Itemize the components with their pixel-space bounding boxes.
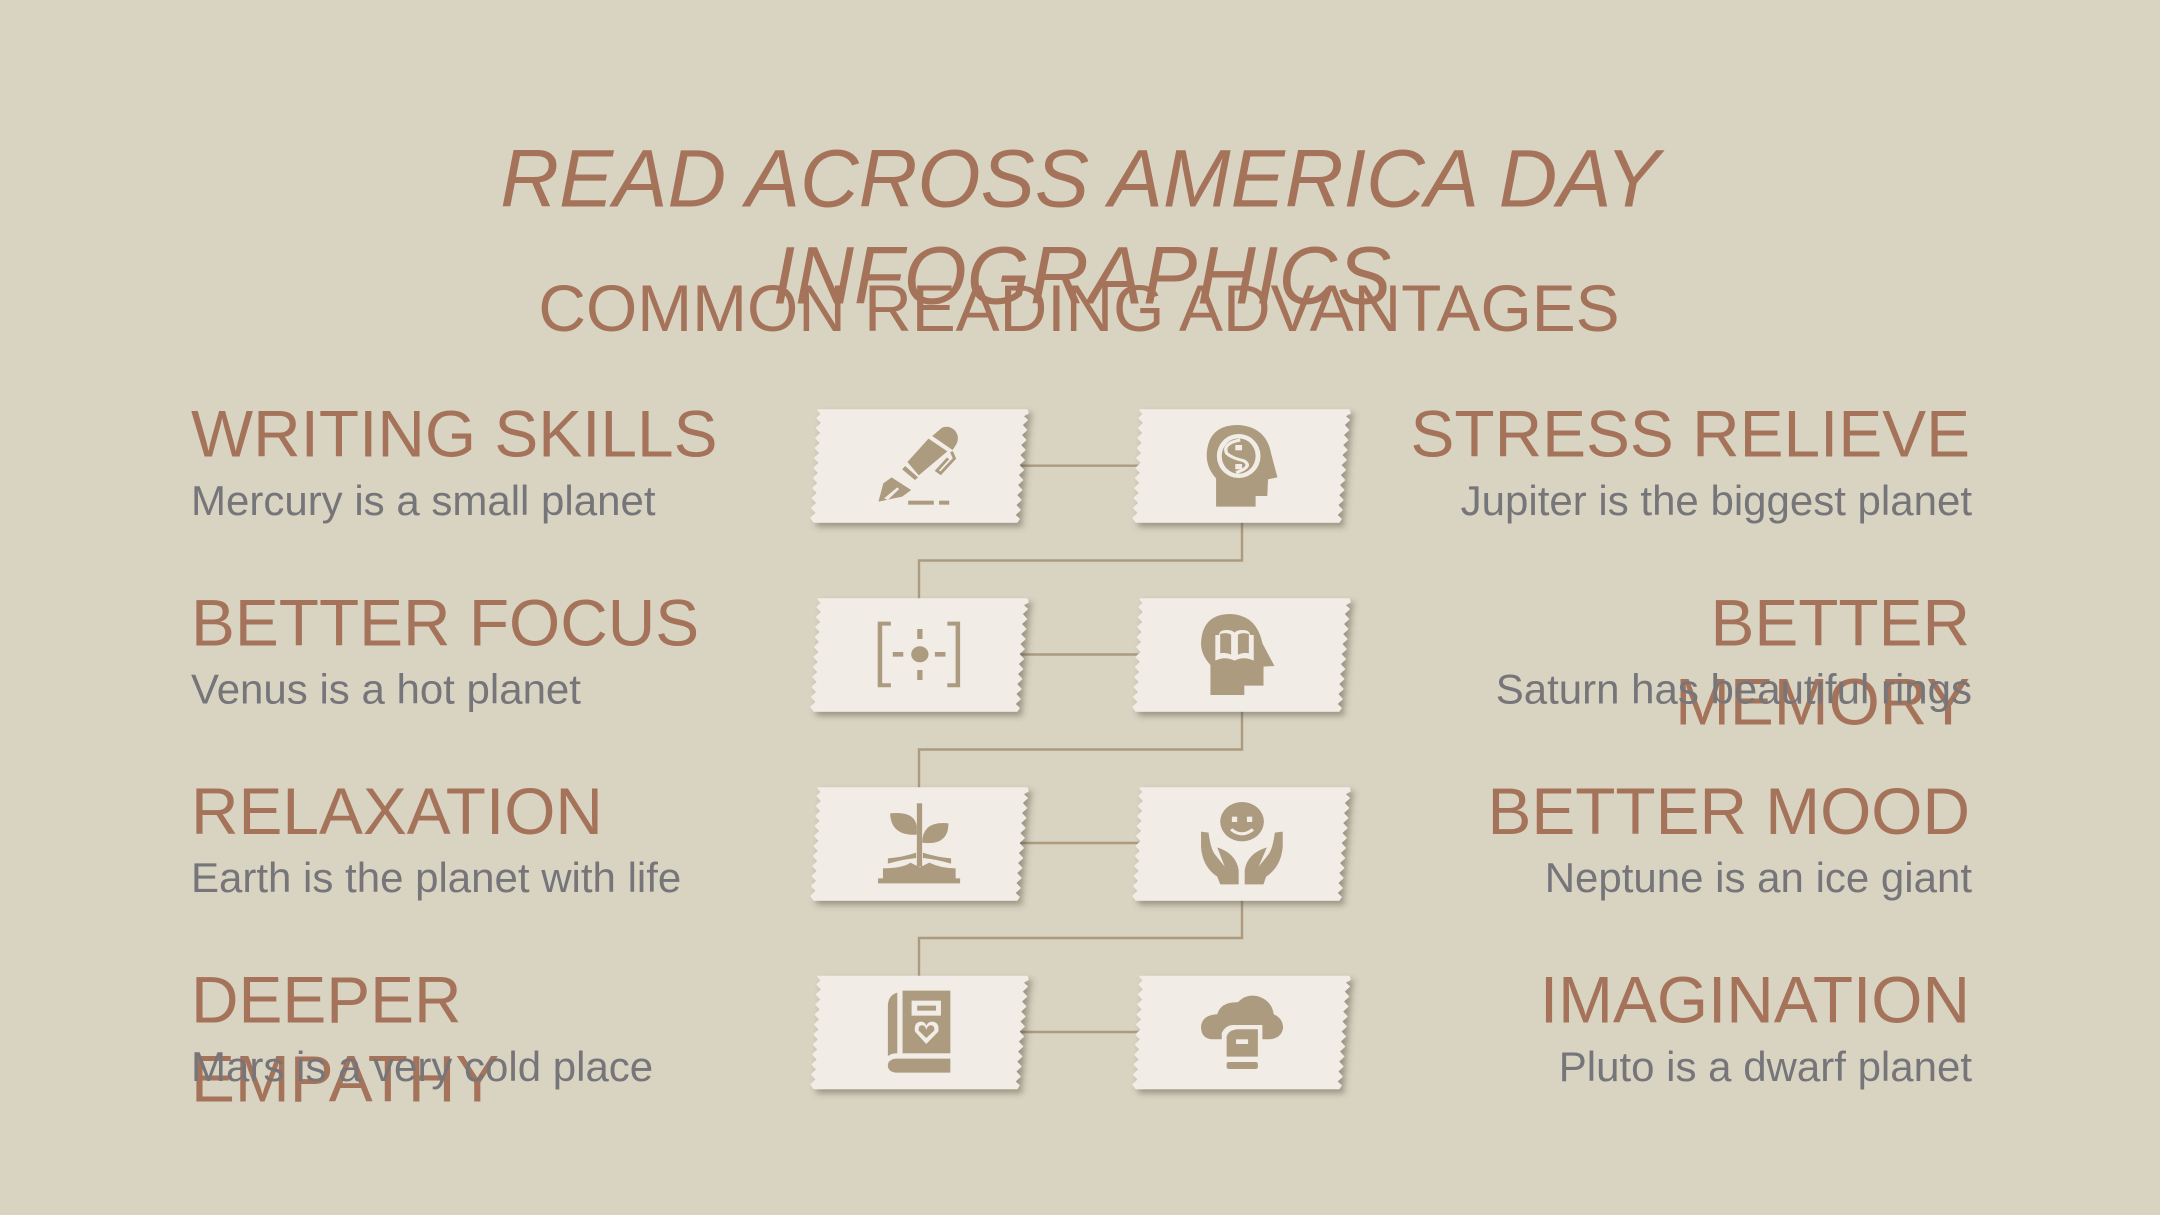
card: writing skills — [811, 410, 1028, 522]
icon: plant growing from book — [878, 803, 960, 883]
item: stress relieve — [1411, 397, 1972, 524]
item: better focus — [191, 586, 699, 712]
card: better memory — [1133, 599, 1350, 711]
item: relaxation: Earth is the planet with life — [191, 854, 681, 901]
item: stress relieve: Jupiter is the biggest planet — [1461, 477, 1972, 524]
item: better focus: Venus is a hot planet — [191, 665, 581, 712]
item: better memory: Saturn has beautiful rings — [1496, 665, 1972, 712]
card: better mood — [1133, 788, 1350, 900]
card: relaxation — [811, 788, 1028, 900]
icon: cloud with book — [1201, 996, 1283, 1069]
item: deeper empathy: EMPATHY — [191, 1042, 499, 1116]
item: better memory: BETTER — [1710, 586, 1970, 660]
icon: hands holding smiley — [1201, 802, 1283, 884]
item: better memory — [1496, 586, 1972, 738]
icon: fountain pen — [878, 427, 958, 505]
connector lines — [919, 466, 1242, 1032]
item: better memory: MEMORY — [1675, 664, 1970, 738]
item: imagination: IMAGINATION — [1540, 963, 1970, 1037]
item: writing skills — [191, 397, 717, 524]
item: relaxation — [191, 774, 681, 901]
icon: head with yin-yang — [1207, 425, 1277, 507]
item: better mood: Neptune is an ice giant — [1545, 854, 1972, 901]
card: better focus — [811, 599, 1028, 711]
card: deeper empathy — [811, 976, 1028, 1088]
item: imagination — [1540, 963, 1972, 1090]
icon: focus brackets — [878, 622, 960, 687]
icon: head with book — [1201, 614, 1274, 695]
item: stress relieve: STRESS RELIEVE — [1411, 397, 1970, 471]
subtitle: COMMON READING ADVANTAGES — [538, 271, 1620, 345]
item: deeper empathy — [191, 963, 653, 1116]
title: INFOGRAPHICS — [773, 230, 1391, 322]
card: stress relieve — [1133, 410, 1350, 522]
icon: book with heart — [888, 991, 950, 1073]
item: better mood — [1487, 774, 1972, 901]
item: writing skills: WRITING SKILLS — [191, 397, 717, 471]
item: deeper empathy: Mars is a very cold place — [191, 1043, 653, 1090]
item: better mood: BETTER MOOD — [1487, 774, 1970, 848]
title: READ ACROSS AMERICA DAY — [500, 134, 1665, 224]
item: deeper empathy: DEEPER — [191, 963, 462, 1037]
card: imagination — [1133, 976, 1350, 1088]
item: relaxation: RELAXATION — [191, 774, 603, 848]
item: writing skills: Mercury is a small planet — [191, 477, 656, 524]
item: imagination: Pluto is a dwarf planet — [1559, 1043, 1972, 1090]
item: better focus: BETTER FOCUS — [191, 586, 699, 660]
